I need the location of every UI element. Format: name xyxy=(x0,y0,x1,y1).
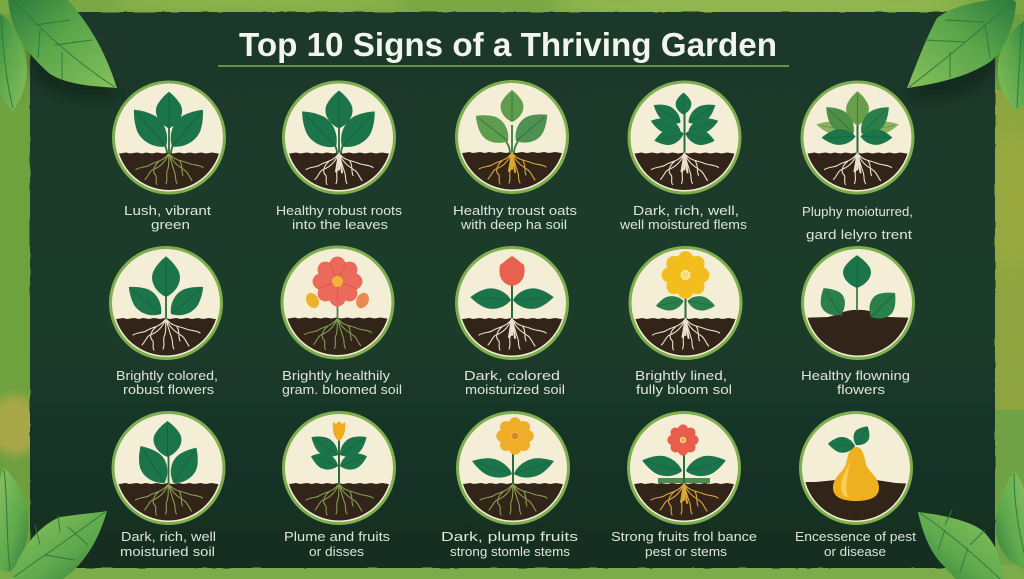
label xyxy=(795,529,916,559)
label: Dark, rich, well xyxy=(121,529,216,544)
label: or disses xyxy=(309,544,365,559)
label: Strong fruits frol bance xyxy=(611,529,757,544)
label: green xyxy=(151,217,190,232)
panel: sign row 1 column 2 xyxy=(276,82,403,232)
panel: sign row 3 column 4 xyxy=(611,412,757,559)
panel: sign row 3 column 2 xyxy=(279,412,396,559)
label xyxy=(453,203,578,232)
label: moisturied soil xyxy=(120,544,215,559)
label: Brightly healthily xyxy=(282,368,391,383)
label: Dark, plump fruits xyxy=(441,529,579,544)
label: Dark, rich, well, xyxy=(633,203,739,218)
label xyxy=(802,204,913,242)
icon: top-left corner leaves xyxy=(0,0,122,111)
panel: sign row 1 column 5 xyxy=(798,82,914,242)
label: robust flowers xyxy=(123,382,215,397)
icon: three leaf plant with green roots xyxy=(109,82,226,198)
icon: three leaf plant with green roots xyxy=(108,412,226,528)
label: well moistured flems xyxy=(619,217,748,232)
panel: sign row 1 column 4 xyxy=(619,82,748,232)
icon: three leaves on soil mound xyxy=(798,248,918,363)
label: flowers xyxy=(837,382,886,397)
label xyxy=(801,368,910,397)
label: Pluphy moioturred, xyxy=(802,204,913,219)
icon: seven leaf plant with white roots xyxy=(624,82,742,198)
label: strong stomle stems xyxy=(450,544,571,559)
title: Top 10 Signs of a Thriving Garden xyxy=(239,26,777,63)
panel: sign row 2 column 4 xyxy=(626,248,742,397)
label: Encessence of pest xyxy=(795,529,916,544)
label xyxy=(464,368,565,397)
label: pest or stems xyxy=(645,544,728,559)
panel: sign row 3 column 3 xyxy=(441,412,579,559)
icon: top-right corner leaves xyxy=(905,0,1024,111)
icon: red tulip with white roots xyxy=(452,248,569,363)
label: with deep ha soil xyxy=(460,217,567,232)
label xyxy=(635,368,732,397)
label xyxy=(116,368,218,397)
label: or disease xyxy=(824,544,886,559)
label xyxy=(276,203,403,232)
icon: three leaf plant with white roots xyxy=(106,248,223,363)
panel: sign row 2 column 5 xyxy=(798,248,918,397)
panel: sign row 3 column 5 xyxy=(795,412,916,559)
icon: multi-tone leaf plant with white roots xyxy=(798,82,914,198)
icon: bottom-right corner leaves xyxy=(918,471,1024,579)
icon: bottom-left corner leaves xyxy=(0,468,107,579)
label: Brightly lined, xyxy=(635,368,727,383)
label: gram. bloomed soil xyxy=(282,382,402,397)
label: into the leaves xyxy=(292,217,389,232)
label: Healthy troust oats xyxy=(453,203,578,218)
panel: sign row 2 column 3 xyxy=(452,248,569,397)
icon: yellow flower with white roots xyxy=(626,248,742,363)
label: Brightly colored, xyxy=(116,368,218,383)
label xyxy=(124,203,211,232)
label xyxy=(284,529,391,559)
icon: light green plant with golden roots xyxy=(452,82,569,197)
label: Plume and fruits xyxy=(284,529,391,544)
label xyxy=(441,529,579,559)
label: gard lelyro trent xyxy=(806,227,912,242)
label: Healthy robust roots xyxy=(276,203,403,218)
title underline xyxy=(218,65,789,67)
panel: sign row 1 column 1 xyxy=(109,82,226,232)
label xyxy=(619,203,748,232)
panel: sign row 2 column 1 xyxy=(106,248,223,397)
label: Healthy flowning xyxy=(801,368,910,383)
label: moisturized soil xyxy=(465,382,565,397)
icon: orange flower with green roots xyxy=(453,412,570,528)
label: fully bloom sol xyxy=(636,382,732,397)
panel: sign row 1 column 3 xyxy=(452,82,578,232)
label xyxy=(120,529,216,559)
icon: small red flower with golden roots xyxy=(624,412,741,528)
icon: large red flower with buds xyxy=(278,247,394,362)
icon: three leaf plant with white roots xyxy=(279,82,396,198)
panel: sign row 3 column 1 xyxy=(108,412,226,559)
label xyxy=(282,368,402,397)
label xyxy=(611,529,757,559)
panel: sign row 2 column 2 xyxy=(278,247,402,397)
icon: yellow pear on soil xyxy=(796,412,916,528)
label: Lush, vibrant xyxy=(124,203,211,218)
icon: yellow bud with two leaf pairs xyxy=(279,412,396,528)
label: Dark, colored xyxy=(464,368,560,383)
